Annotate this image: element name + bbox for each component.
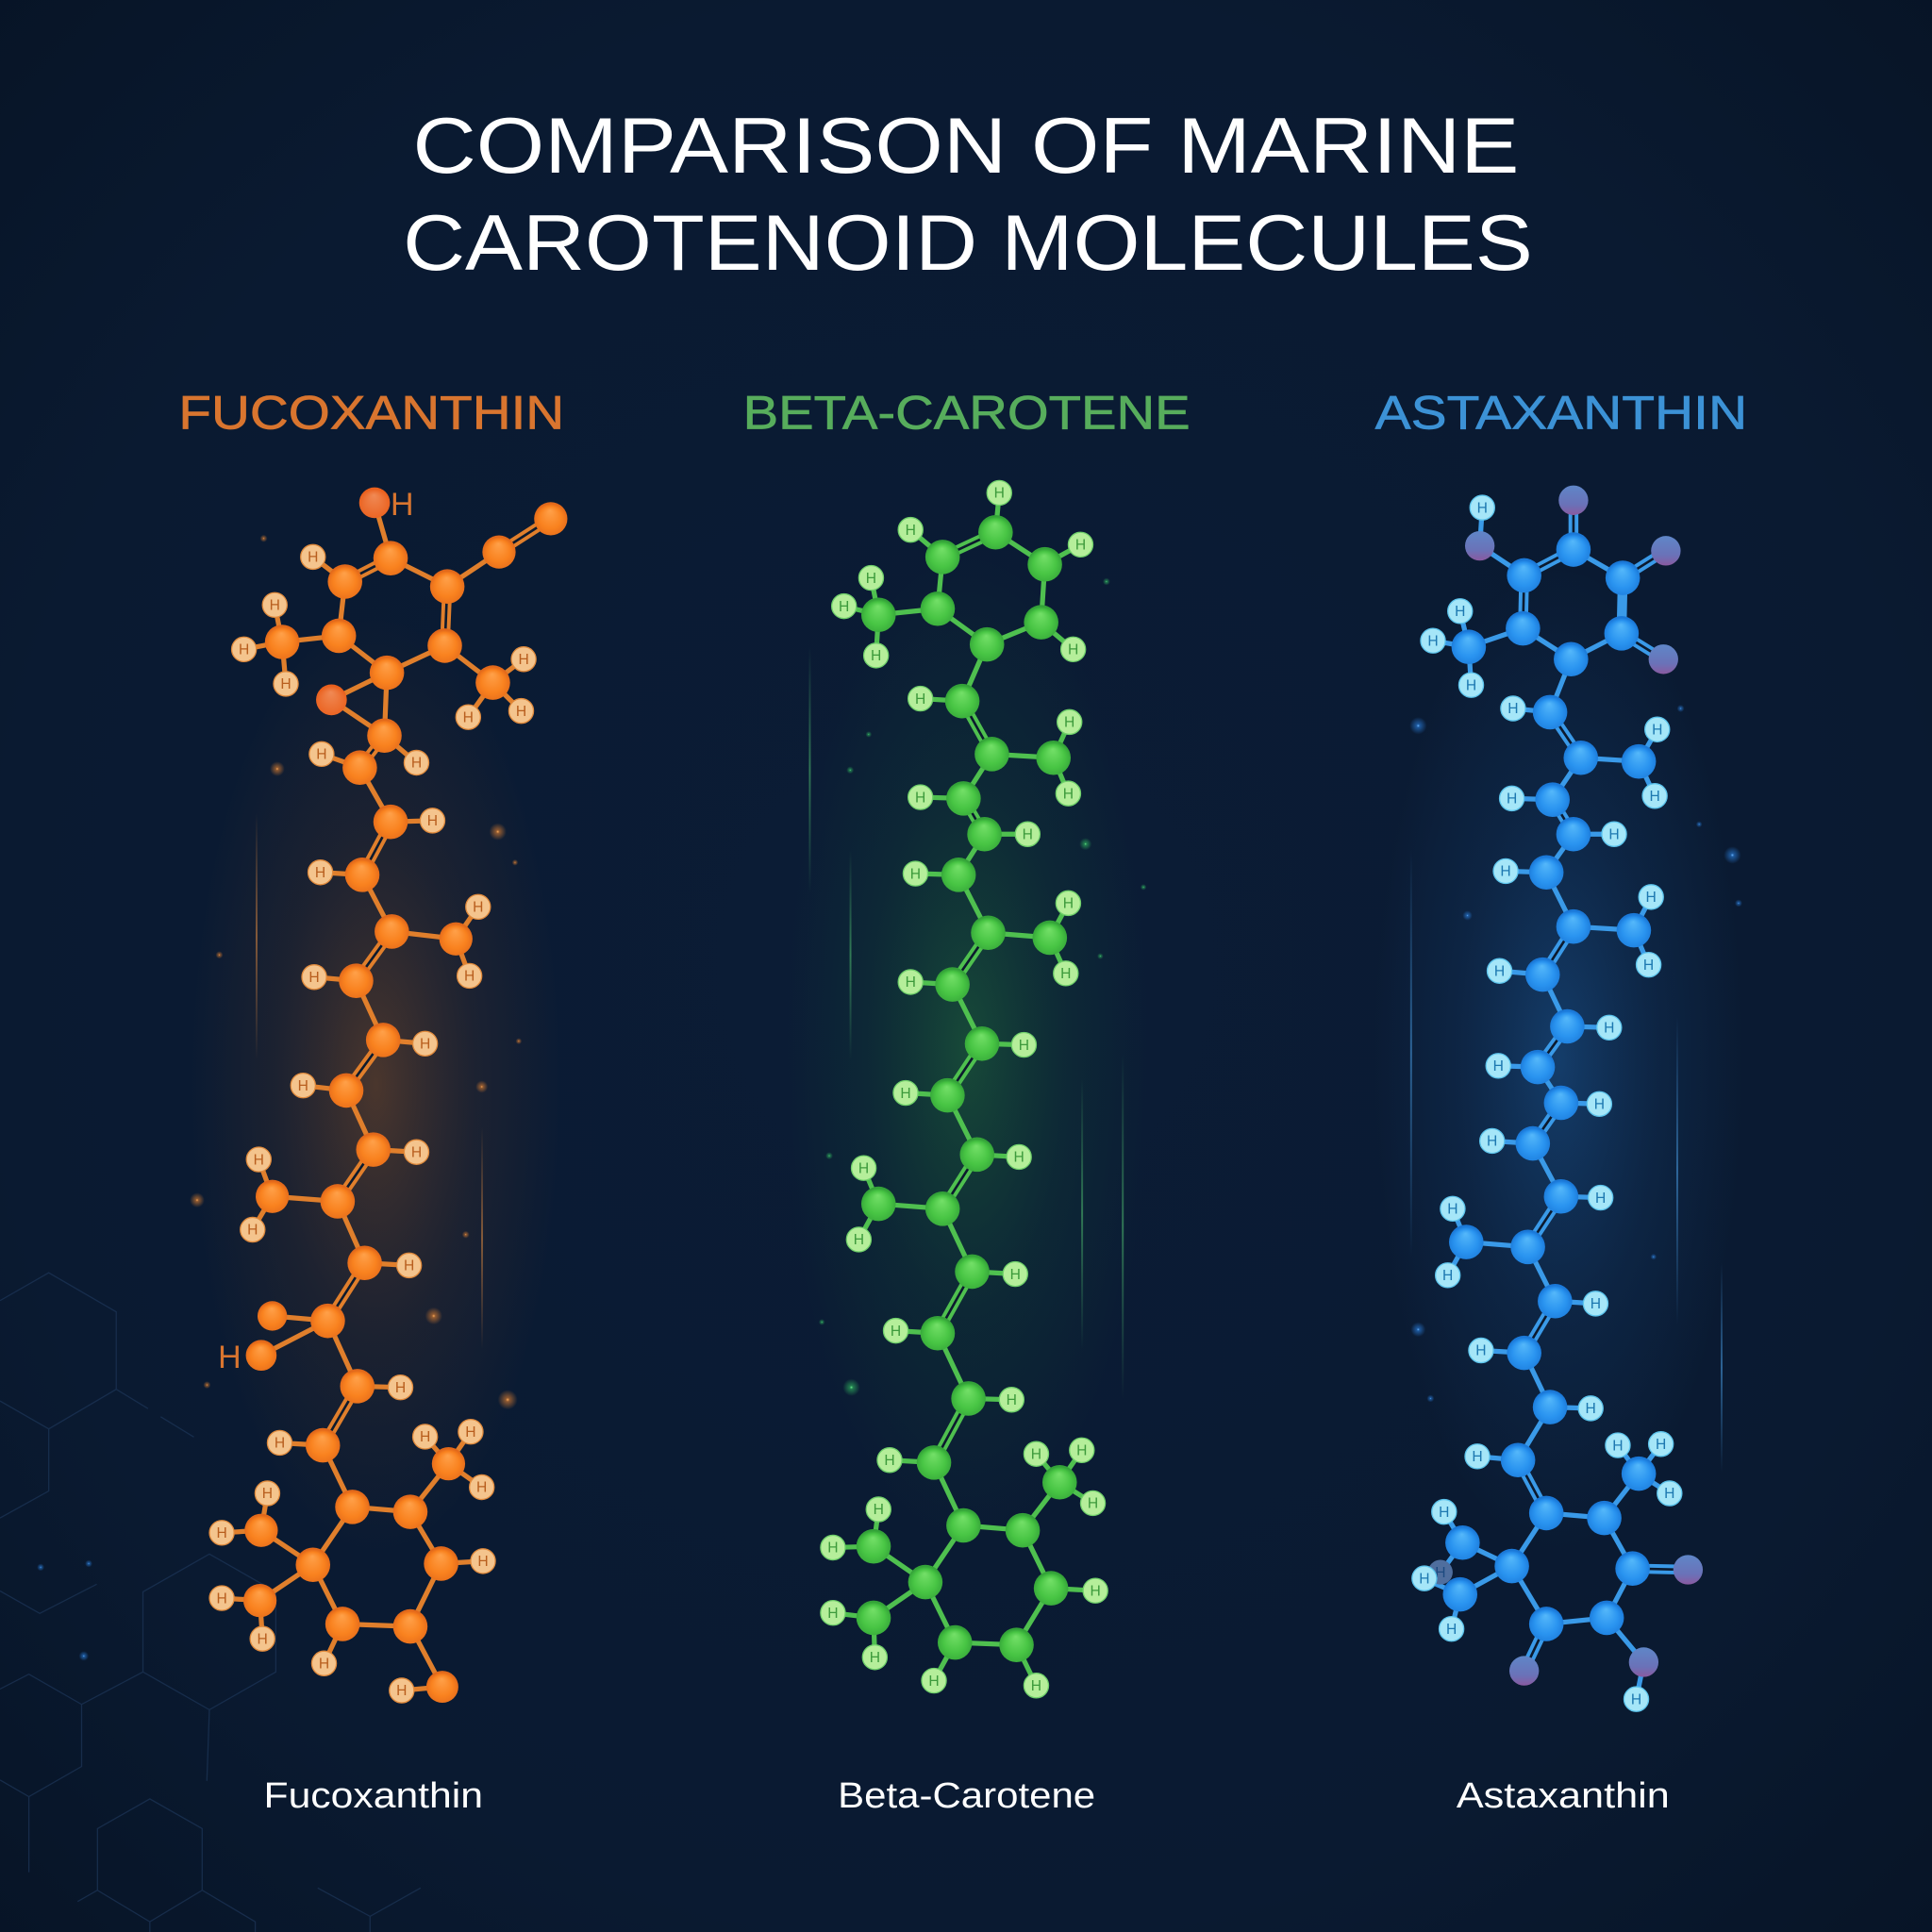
fucoxanthin hydrogen labels: H [280,676,291,692]
astaxanthin hydrogen labels: H [1447,1202,1458,1218]
astaxanthin hydrogen labels: H [1446,1622,1457,1638]
fucoxanthin hydrogen labels [216,550,529,1699]
beta-carotene hydrogen labels: H [994,486,1005,502]
beta-carotene hydrogen labels: H [866,571,876,587]
fucoxanthin hydrogen labels: H [216,1591,227,1607]
title [403,101,1533,287]
beta-carotene bonds [833,492,1095,1686]
heading: beta-carotene: BETA-CAROTENE [743,387,1191,440]
fucoxanthin hydrogen labels: H [216,1525,227,1541]
fucoxanthin hydrogen labels: H [254,1152,264,1168]
beta-carotene hydrogen labels: H [1023,826,1033,842]
fucoxanthin hydrogen labels: H [308,970,320,986]
beta-carotene hydrogen labels: H [1010,1267,1021,1283]
fucoxanthin double-bond gaps [323,519,551,1445]
heading: fucoxanthin: FUCOXANTHIN [178,387,564,440]
astaxanthin hydrogen labels: H [1500,864,1511,880]
molecule: astaxanthin [1412,486,1703,1711]
beta-carotene hydrogen labels: H [906,974,916,991]
fucoxanthin carbon atoms [243,502,567,1703]
astaxanthin hydrogen labels: H [1652,722,1662,738]
astaxanthin hydrogen labels: H [1643,958,1654,974]
beta-carotene hydrogen labels: H [915,691,925,708]
beta-carotene hydrogen labels: H [1007,1392,1017,1408]
caption: astaxanthin: Astaxanthin [1457,1776,1670,1816]
fucoxanthin hydrogen labels: H [411,1144,422,1160]
fucoxanthin oxygen atoms [316,488,390,715]
beta-carotene hydrogen labels: H [827,1541,839,1557]
fucoxanthin hydrogen labels: H [258,1631,268,1647]
astaxanthin dim hydrogen [1428,1560,1453,1585]
astaxanthin hydrogen labels: H [1594,1097,1605,1113]
heading: astaxanthin: ASTAXANTHIN [1375,387,1747,440]
astaxanthin hydrogen labels: H [1664,1486,1674,1502]
fucoxanthin hydrogen labels: H [420,1429,430,1445]
astaxanthin hydrogen atoms [1412,495,1682,1711]
title: COMPARISON OF MARINE [413,101,1519,190]
beta-carotene hydrogen labels: H [891,1324,901,1340]
molecule: beta-carotene [821,480,1108,1698]
fucoxanthin hydrogen labels: H [315,865,325,881]
glow: beta-carotene [782,555,1152,1541]
beta-carotene hydrogen labels: H [871,648,881,664]
caption: fucoxanthin: Fucoxanthin [264,1776,483,1816]
fucoxanthin hydrogen labels: H [463,709,474,725]
fucoxanthin hydrogen labels: H [518,652,529,668]
astaxanthin hydrogen labels: H [1656,1437,1666,1453]
beta-carotene hydrogen labels: H [827,1606,839,1622]
fucoxanthin hydrogen labels: H [247,1223,258,1239]
astaxanthin hydrogen labels: H [1427,633,1439,649]
astaxanthin hydrogen labels: H [1649,789,1660,805]
caption: beta-carotene: Beta-Carotene [838,1776,1095,1816]
glow: fucoxanthin [191,616,560,1553]
fucoxanthin hydrogen labels: H [420,1037,430,1053]
astaxanthin hydrogen labels: H [1612,1438,1624,1454]
molecule: fucoxanthin [209,487,567,1703]
beta-carotene hydrogen labels: H [839,599,849,615]
astaxanthin hydrogen labels: H [1472,1449,1483,1465]
fucoxanthin hydrogen labels: H [262,1486,273,1502]
fucoxanthin hydrogen labels: H [477,1554,489,1570]
beta-carotene hydrogen labels: H [854,1232,864,1248]
astaxanthin hydrogen labels: H [1475,1343,1487,1359]
astaxanthin hydrogen labels: H [1487,1134,1497,1150]
beta-carotene hydrogen labels: H [1068,642,1078,658]
beta-carotene hydrogen labels: H [915,790,925,806]
fucoxanthin hydrogen labels: H [316,747,327,763]
vertical light streaks [256,647,1723,1473]
fucoxanthin hydrogen labels: H [464,969,475,985]
title: CAROTENOID MOLECULES [403,198,1533,287]
astaxanthin dim hydrogen: H [1435,1565,1446,1581]
fucoxanthin hydroxyl H labels: H [218,1340,242,1375]
beta-carotene hydrogen labels: H [1031,1446,1041,1462]
fucoxanthin hydrogen labels: H [275,1436,285,1452]
astaxanthin bonds [1417,500,1688,1699]
beta-carotene hydrogen labels: H [910,866,921,882]
astaxanthin hydrogen labels: H [1591,1296,1601,1312]
fucoxanthin hydrogen labels: H [270,598,280,614]
fucoxanthin hydrogen labels: H [427,813,438,829]
astaxanthin hydrogen labels: H [1586,1401,1596,1417]
beta-carotene hydrogen labels: H [884,1453,895,1469]
astaxanthin hydrogen labels [1419,500,1674,1707]
beta-carotene hydrogen labels: H [1088,1496,1098,1512]
astaxanthin hydrogen labels: H [1507,701,1519,717]
fucoxanthin bonds [222,503,551,1690]
beta-carotene hydrogen labels: H [1019,1038,1029,1054]
beta-carotene hydrogen labels: H [900,1086,911,1102]
astaxanthin hydrogen labels: H [1493,1058,1504,1074]
beta-carotene hydrogen labels [827,486,1101,1694]
fucoxanthin hydrogen labels: H [239,642,249,658]
beta-carotene hydrogen labels: H [928,1674,940,1690]
fucoxanthin hydrogen labels: H [473,900,483,916]
beta-carotene hydrogen labels: H [906,523,916,539]
astaxanthin hydrogen labels: H [1419,1571,1430,1587]
fucoxanthin hydrogen labels: H [404,1258,414,1274]
glow: astaxanthin [1374,567,1743,1553]
beta-carotene hydrogen labels: H [1064,715,1074,731]
astaxanthin hydrogen labels: H [1608,826,1620,842]
beta-carotene double-bond gaps [934,532,995,1462]
fucoxanthin hydrogen labels: H [516,704,526,720]
astaxanthin hydrogen labels: H [1631,1691,1641,1707]
fucoxanthin hydrogen labels: H [308,550,318,566]
astaxanthin hydrogen labels: H [1646,890,1657,906]
astaxanthin hydrogen labels: H [1442,1268,1453,1284]
fucoxanthin hydrogen labels: H [476,1480,487,1496]
beta-carotene hydrogen labels: H [870,1650,880,1666]
beta-carotene hydrogen labels: H [1060,966,1071,982]
beta-carotene hydrogen labels: H [874,1502,884,1518]
fucoxanthin hydroxyl H labels: H [391,487,414,523]
astaxanthin oxygen atoms [1465,486,1703,1686]
beta-carotene hydrogen labels: H [1075,538,1086,554]
astaxanthin hydrogen labels: H [1604,1021,1614,1037]
beta-carotene hydrogen labels: H [1063,786,1074,802]
fucoxanthin hydrogen labels: H [396,1683,407,1699]
beta-carotene hydrogen labels: H [1063,896,1074,912]
astaxanthin hydrogen labels: H [1595,1191,1606,1207]
beta-carotene hydrogen labels: H [858,1160,869,1176]
fucoxanthin hydrogen labels: H [411,756,422,772]
floating particles [37,535,1742,1661]
astaxanthin hydrogen labels: H [1507,791,1517,808]
background hexagon pattern [0,1273,421,1932]
astaxanthin hydrogen labels: H [1477,500,1488,516]
fucoxanthin hydrogen labels: H [319,1656,329,1672]
astaxanthin hydrogen labels: H [1494,963,1505,979]
beta-carotene carbon atoms [857,515,1077,1662]
beta-carotene hydrogen atoms [821,480,1108,1698]
astaxanthin hydrogen labels: H [1455,604,1465,620]
astaxanthin hydrogen labels: H [1439,1505,1449,1521]
astaxanthin carbon atoms [1442,532,1656,1641]
beta-carotene hydrogen labels: H [1090,1583,1101,1599]
fucoxanthin hydrogen labels: H [395,1380,406,1396]
fucoxanthin hydroxyl H labels [218,487,414,1375]
fucoxanthin hydrogen atoms [209,544,536,1703]
astaxanthin hydrogen labels: H [1466,677,1476,693]
beta-carotene hydrogen labels: H [1076,1443,1087,1459]
fucoxanthin hydrogen labels: H [465,1424,476,1441]
fucoxanthin hydrogen labels: H [298,1078,308,1094]
astaxanthin double-bond gaps [1518,500,1688,1671]
beta-carotene hydrogen labels: H [1014,1150,1024,1166]
beta-carotene hydrogen labels: H [1031,1678,1041,1694]
